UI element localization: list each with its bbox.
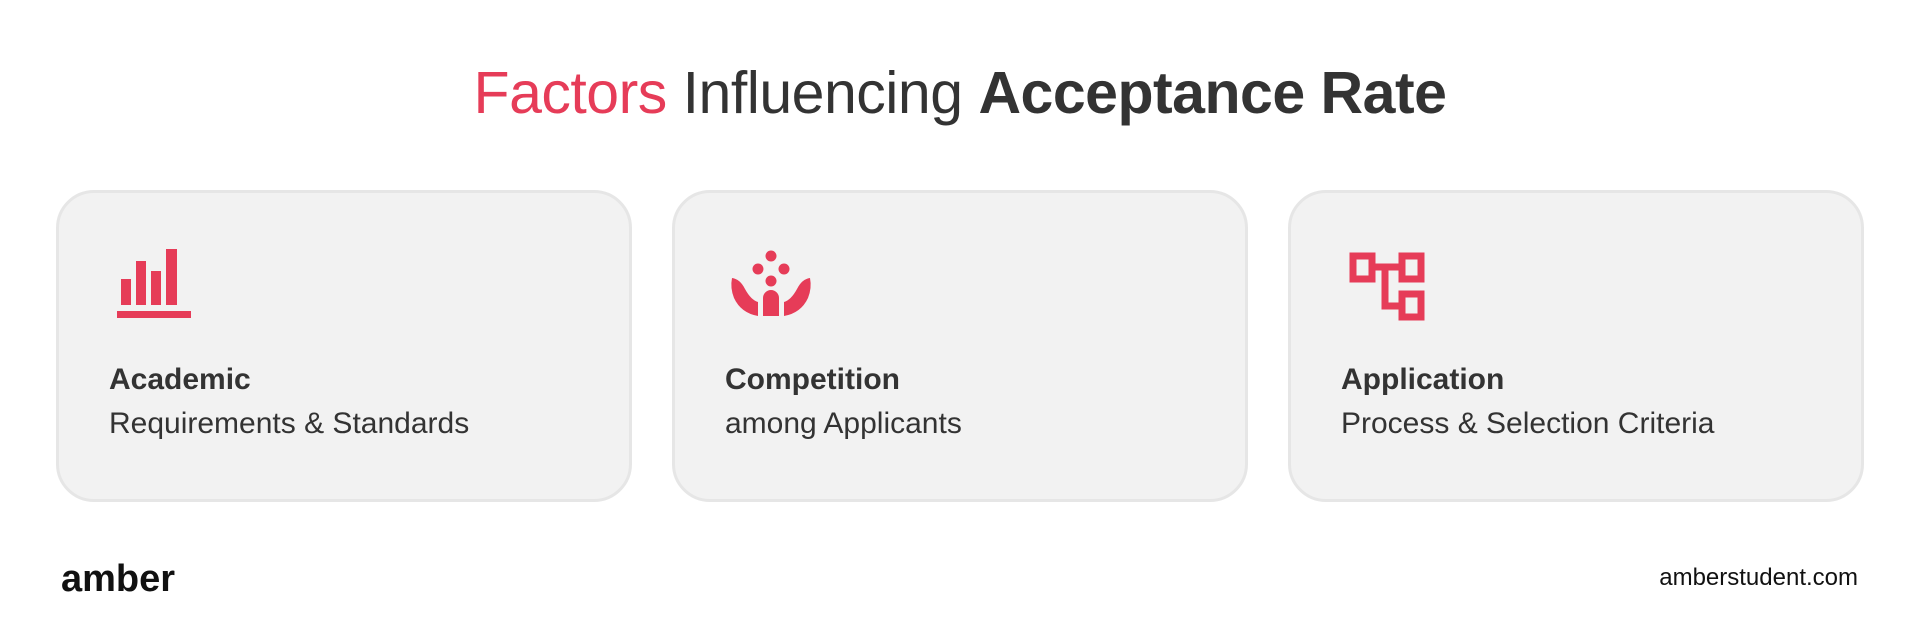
panel: competition — [672, 190, 1248, 502]
url: amberstudent.com — [1659, 564, 1858, 591]
icon: flowchart — [1350, 252, 1424, 320]
heading: Academic — [109, 363, 251, 396]
text: among Applicants — [725, 407, 962, 440]
icon: bar chart — [117, 249, 191, 318]
panel: application — [1288, 190, 1864, 502]
heading: Application — [1341, 363, 1504, 396]
panel: academic — [56, 190, 632, 502]
text: Requirements & Standards — [109, 407, 469, 440]
text: Process & Selection Criteria — [1341, 407, 1714, 440]
icon: people — [731, 250, 811, 316]
title: Factors Influencing Acceptance Rate — [474, 60, 1446, 126]
logo: amber — [61, 558, 175, 600]
heading: Competition — [725, 363, 900, 396]
